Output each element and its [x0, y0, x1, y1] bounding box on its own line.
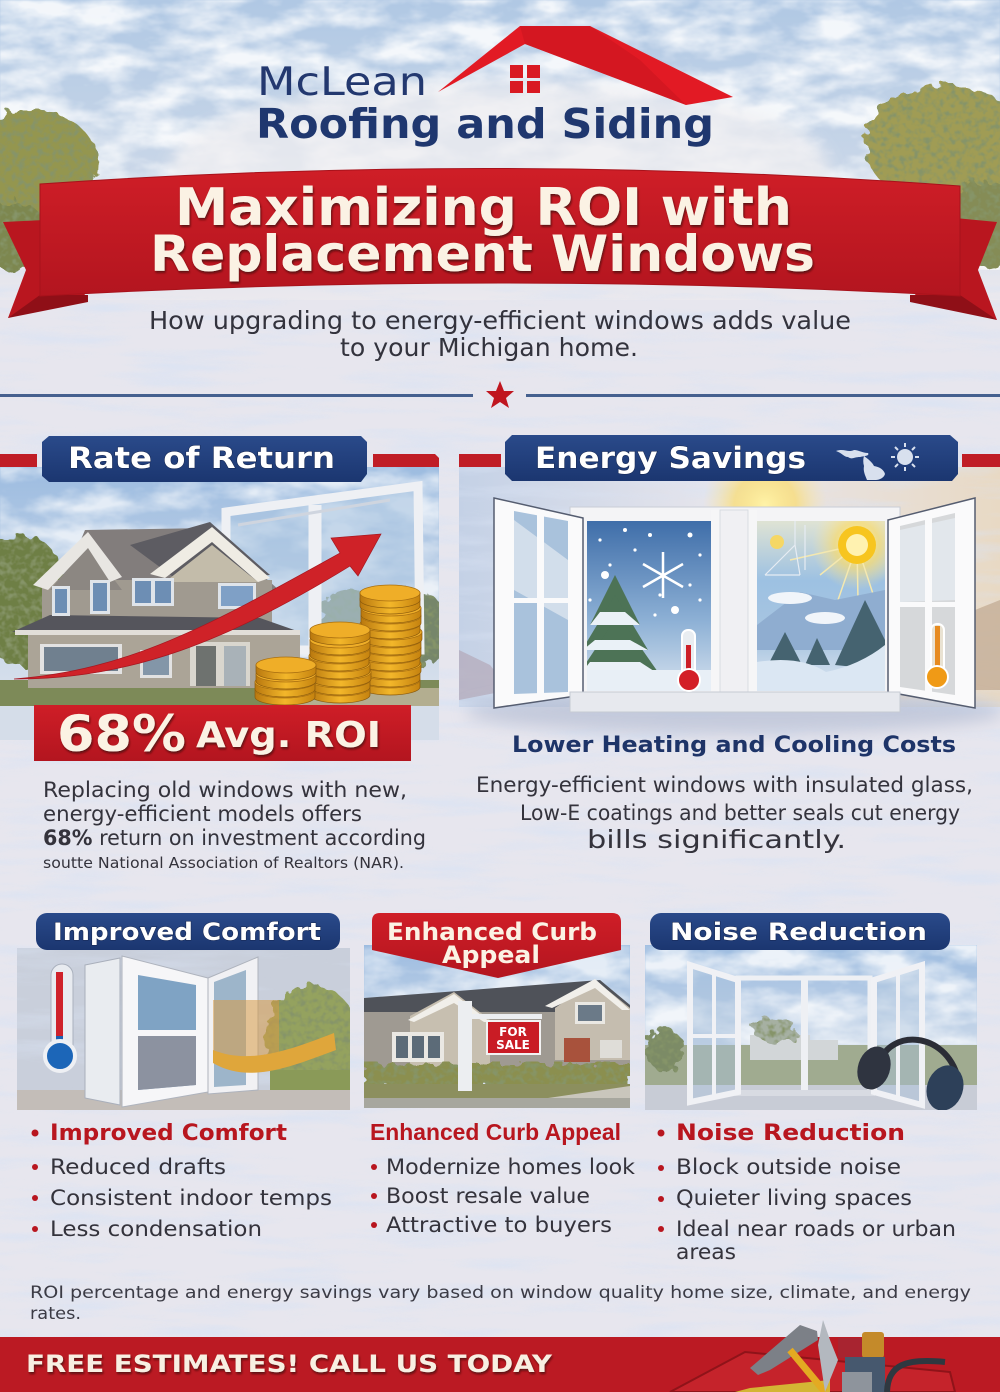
for sale sign: SALE [496, 1038, 530, 1052]
energy description: bills significantly. [587, 825, 846, 854]
window frame [570, 507, 900, 712]
window unit [85, 956, 279, 1107]
logo: McLean Roofing and Siding: Roofing and Siding [256, 100, 714, 148]
trees: left and right [0, 85, 1000, 269]
scene: window and headphones [645, 945, 977, 1115]
sill [570, 692, 900, 712]
improved comfort header: Improved Comfort [53, 918, 321, 946]
icon: toolbox [670, 1320, 955, 1392]
noise reduction header: Noise Reduction [670, 918, 927, 946]
house [12, 522, 300, 688]
title banner: Replacement Windows [150, 225, 815, 283]
energy savings header [459, 435, 1000, 481]
title banner: Maximizing ROI with [175, 178, 792, 238]
enhanced curb appeal list: Enhanced Curb Appeal [370, 1119, 621, 1145]
improved comfort list: Reduced drafts [50, 1155, 226, 1179]
rate of return description: energy-efficient models offers [43, 802, 362, 826]
enhanced curb appeal list: Attractive to buyers [386, 1213, 612, 1237]
improved comfort list: Improved Comfort [50, 1121, 287, 1146]
rate of return header: Rate of Return [68, 441, 335, 475]
panel: energy savings [459, 435, 1000, 854]
for sale sign: FOR [499, 1025, 527, 1039]
icon: michigan and sun [836, 443, 919, 480]
logo: McLean Roofing and Siding [256, 26, 733, 148]
big window frame [226, 486, 420, 655]
panel: improved comfort [17, 913, 360, 1241]
footer call to action: FREE ESTIMATES! CALL US TODAY [26, 1350, 553, 1378]
noise reduction list: Ideal near roads or urban [676, 1217, 956, 1241]
noise reduction list: Noise Reduction [676, 1121, 905, 1146]
rate of return description [43, 778, 426, 872]
scene: house with for sale sign [364, 945, 630, 1108]
enhanced curb appeal list: Modernize homes look [386, 1155, 636, 1179]
double window [494, 498, 975, 712]
enhanced curb appeal list [370, 1119, 636, 1237]
growth arrow [14, 534, 381, 679]
star divider [0, 381, 1000, 408]
rate of return header [0, 436, 439, 482]
gold coin stacks [255, 585, 422, 705]
noise reduction list [658, 1121, 956, 1264]
thermometers [678, 624, 948, 691]
energy subheading: Lower Heating and Cooling Costs [512, 733, 956, 758]
warm air band [213, 1033, 336, 1073]
footnote [30, 1283, 971, 1324]
energy description [476, 773, 973, 854]
scene backdrop [459, 443, 1000, 734]
enhanced curb appeal pennant header [372, 913, 621, 978]
icon: red roof [438, 26, 733, 105]
panel: noise reduction [645, 913, 977, 1264]
enhanced curb appeal list: Boost resale value [386, 1184, 590, 1208]
noise reduction list: Quieter living spaces [676, 1186, 912, 1210]
scene: house, window, arrow and coins [0, 467, 449, 740]
rate of return description: Replacing old windows with new, [43, 778, 407, 802]
left sash [494, 498, 583, 708]
energy description: Energy-efficient windows with insulated glass, [476, 773, 973, 797]
center mullion [711, 510, 757, 708]
rate of return description: 68% return on investment according [43, 826, 426, 850]
footer call to action [0, 1320, 1000, 1392]
improved comfort list: Consistent indoor temps [50, 1186, 332, 1210]
noise reduction list: areas [676, 1240, 736, 1264]
thermometer icon [45, 964, 75, 1071]
subtitle: How upgrading to energy-efficient windows adds value [149, 306, 851, 335]
logo: McLean Roofing and Siding: McLean [257, 60, 427, 105]
ribbon tails [3, 218, 997, 320]
headphones [857, 1036, 964, 1110]
panel: enhanced curb appeal [364, 913, 636, 1237]
noise reduction header [650, 913, 950, 950]
energy description: Low-E coatings and better seals cut energy [520, 801, 960, 825]
summer pane [757, 521, 885, 691]
improved comfort list: Less condensation [50, 1217, 262, 1241]
enhanced curb appeal pennant header: Appeal [442, 941, 540, 969]
noise reduction list: Block outside noise [676, 1155, 901, 1179]
for sale sign [458, 1001, 542, 1091]
title banner [3, 168, 997, 320]
scene: window and thermometer [17, 948, 360, 1110]
enhanced curb appeal pennant header: Enhanced Curb [387, 918, 597, 946]
improved comfort list [32, 1121, 332, 1241]
energy savings header: Energy Savings [535, 441, 806, 475]
panel: rate of return [0, 436, 449, 872]
subtitle [149, 306, 851, 362]
winter pane [578, 521, 711, 692]
roi callout [34, 705, 411, 763]
left and right sashes [690, 965, 922, 1105]
footnote: ROI percentage and energy savings vary based on window quality home size, climate, and energy [30, 1283, 971, 1303]
right sash [888, 498, 975, 708]
roi callout: 68% [57, 705, 186, 763]
rate of return description: soutte National Association of Realtors (NAR). [43, 854, 404, 872]
footnote: rates. [30, 1304, 81, 1324]
improved comfort header [36, 913, 340, 950]
roi callout: Avg. ROI [196, 715, 381, 756]
subtitle: to your Michigan home. [340, 333, 638, 362]
